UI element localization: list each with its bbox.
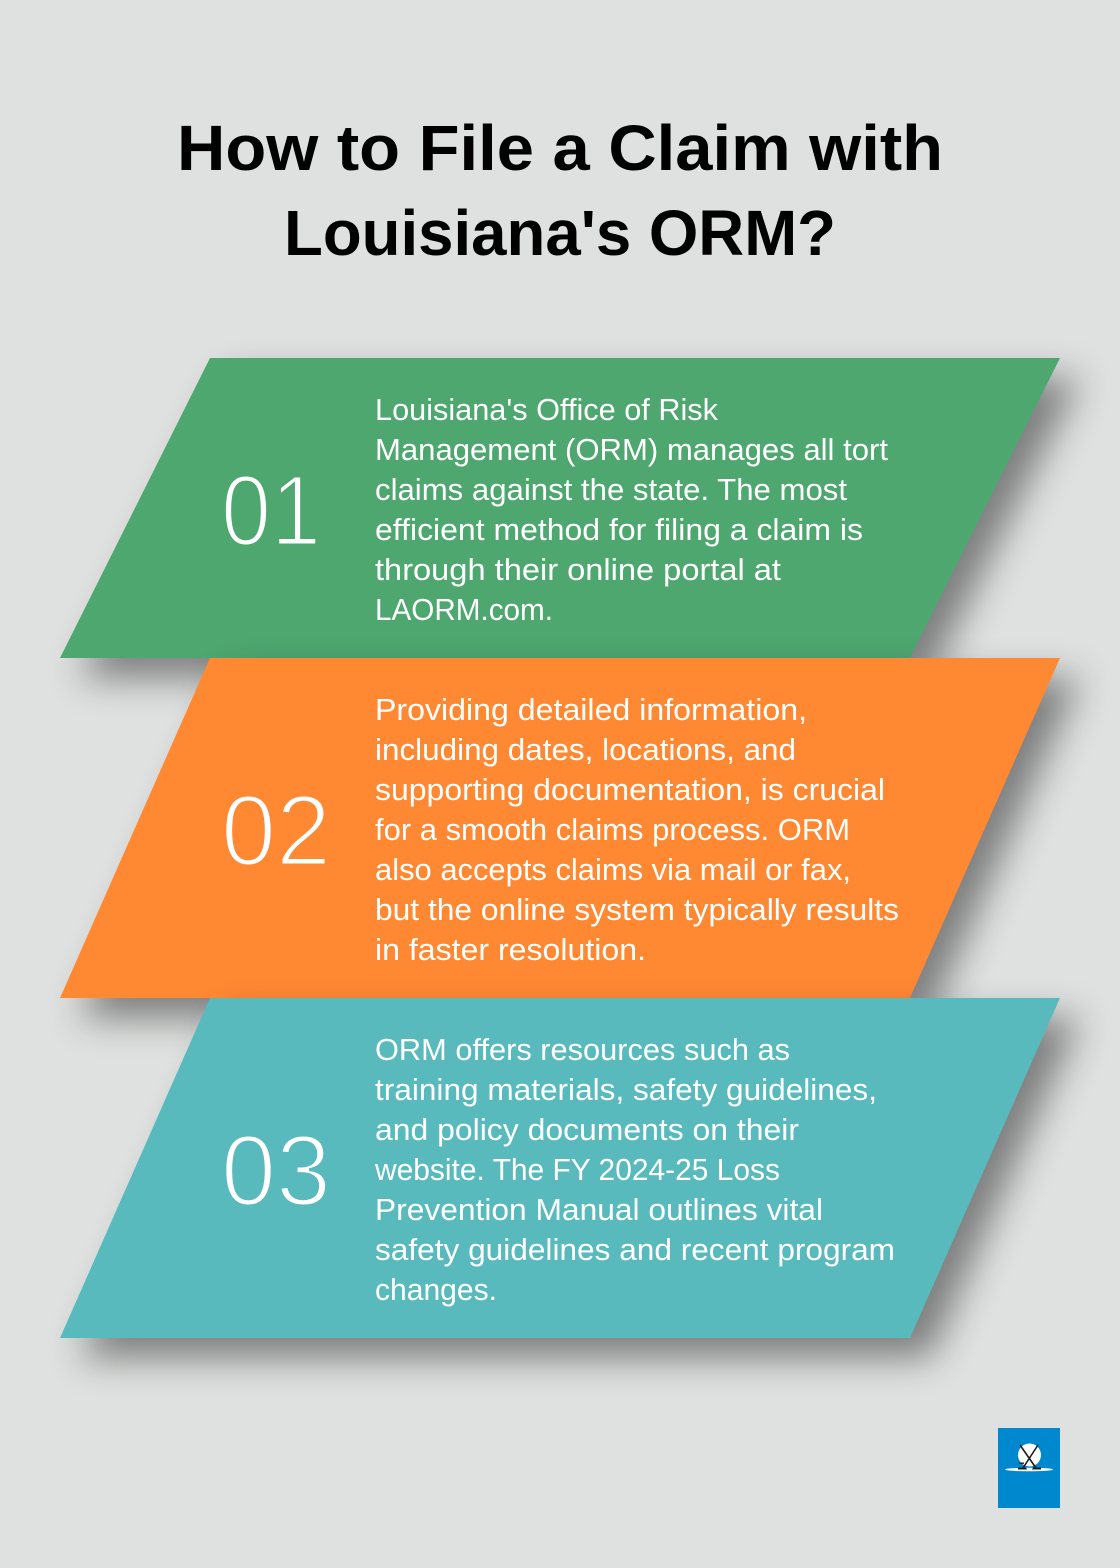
text block 03: safety guidelines and recent program (375, 1232, 895, 1267)
text block 02: including dates, locations, and (375, 732, 796, 767)
orange parallelogram (60, 658, 1060, 998)
icon: hockey logo (998, 1428, 1060, 1508)
text block 01: Management (ORM) manages all tort (375, 432, 888, 467)
text block 01: Louisiana's Office of Risk (375, 392, 718, 427)
panel: step 01 (60, 358, 1060, 658)
text block 01: through their online portal at (375, 552, 781, 587)
title: How to File a Claim with (177, 112, 943, 184)
text block 02: Providing detailed information, (375, 692, 807, 727)
green parallelogram (60, 358, 1060, 658)
text block 01: claims against the state. The most (375, 472, 847, 507)
text block 03: Prevention Manual outlines vital (375, 1192, 823, 1227)
number 02: 02 (221, 775, 331, 887)
text block 01: efficient method for filing a claim is (375, 512, 863, 547)
text block 01: LAORM.com. (375, 592, 553, 627)
text block 03: ORM offers resources such as (375, 1032, 790, 1067)
number 01: 01 (221, 455, 321, 567)
title: Louisiana's ORM? (284, 197, 836, 269)
text block 02 (375, 692, 899, 967)
text block 03: and policy documents on their (375, 1112, 799, 1147)
text block 02: also accepts claims via mail or fax, (375, 852, 851, 887)
text block 02: in faster resolution. (375, 932, 646, 967)
panel: step 02 (60, 658, 1060, 998)
panel: step 03 (60, 998, 1060, 1338)
text block 02: supporting documentation, is crucial (375, 772, 885, 807)
text block 03: training materials, safety guidelines, (375, 1072, 877, 1107)
teal parallelogram (60, 998, 1060, 1338)
text block 03: changes. (375, 1272, 497, 1307)
text block 03 (374, 1032, 895, 1307)
text block 01 (375, 392, 888, 627)
text block 03: website. The FY 2024-25 Loss (374, 1152, 780, 1187)
text block 02: for a smooth claims process. ORM (375, 812, 850, 847)
text block 02: but the online system typically results (375, 892, 899, 927)
title (177, 112, 943, 269)
number 03: 03 (221, 1115, 331, 1227)
